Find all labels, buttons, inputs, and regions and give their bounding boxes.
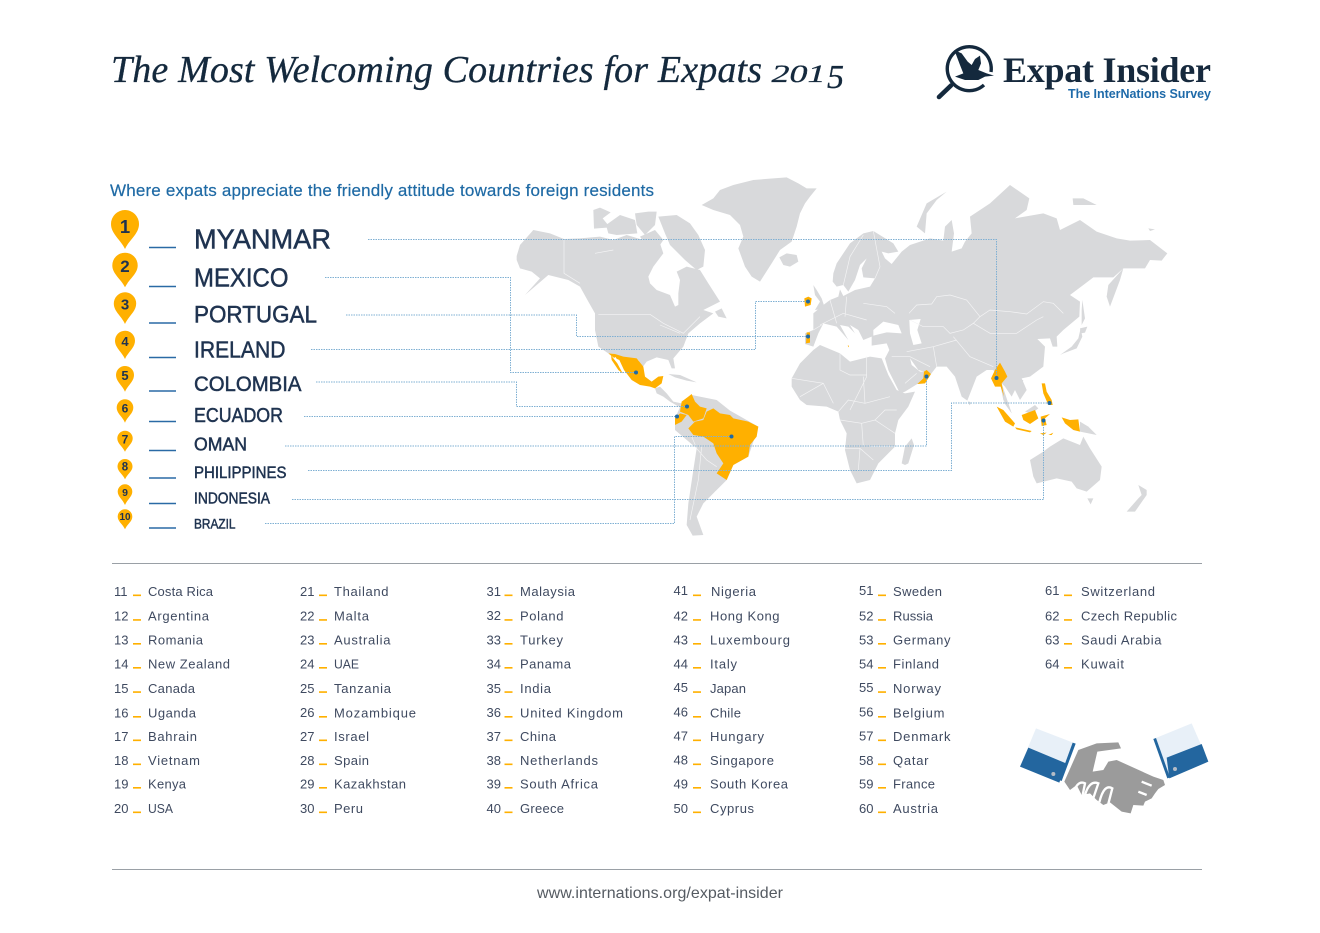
world map bbox=[517, 177, 1167, 536]
list column 41-50: 41 bbox=[674, 583, 688, 598]
list column 61-64 bbox=[1045, 583, 1178, 672]
list column 11-20: New Zealand bbox=[148, 656, 230, 672]
list column 11-20 bbox=[114, 584, 230, 816]
list column 11-20: Kenya bbox=[148, 776, 187, 792]
title: The Most Welcoming Countries for Expats bbox=[111, 49, 762, 91]
connector lines bbox=[265, 240, 1049, 524]
list column 31-40: 35 bbox=[486, 681, 501, 696]
list column 61-64: 62 bbox=[1045, 609, 1059, 624]
list column 51-60: 57 bbox=[859, 728, 873, 744]
list column 11-20: 16 bbox=[114, 706, 128, 720]
list column 51-60: 53 bbox=[859, 632, 873, 648]
logo: Expat Insider bbox=[939, 47, 1211, 101]
list column 31-40: 34 bbox=[486, 656, 501, 672]
list column 41-50: Italy bbox=[710, 656, 738, 672]
list column 51-60: Finland bbox=[893, 656, 939, 672]
list column 21-30: Malta bbox=[334, 609, 370, 624]
list column 21-30: Mozambique bbox=[334, 706, 416, 720]
location dots bbox=[634, 300, 1052, 438]
list column 41-50: Chile bbox=[710, 706, 741, 720]
list column 51-60: 58 bbox=[859, 753, 873, 768]
pins: 9 bbox=[122, 487, 128, 499]
list column 21-30: Kazakhstan bbox=[334, 776, 406, 792]
list column 31-40: 31 bbox=[486, 584, 501, 599]
list column 51-60: 56 bbox=[859, 704, 873, 720]
list column 41-50: Hungary bbox=[710, 729, 764, 744]
list column 41-50: 47 bbox=[674, 728, 688, 744]
list column 21-30: UAE bbox=[334, 656, 359, 672]
list column 51-60: 55 bbox=[859, 680, 873, 695]
list column 61-64: Switzerland bbox=[1081, 584, 1155, 599]
list column 51-60: 59 bbox=[859, 776, 873, 792]
list column 11-20: 13 bbox=[114, 632, 128, 648]
country names: MEXICO bbox=[194, 263, 288, 293]
list column 61-64: 61 bbox=[1045, 583, 1059, 598]
map: Americas bbox=[517, 177, 825, 536]
country names: IRELAND bbox=[194, 337, 286, 363]
list column 61-64: Kuwait bbox=[1081, 656, 1124, 672]
list column 21-30: Israel bbox=[334, 729, 369, 744]
list column 51-60 bbox=[859, 583, 951, 816]
icon: magnifying glass with bird bbox=[939, 47, 994, 97]
pins: 3 bbox=[121, 296, 129, 314]
list column 31-40: 39 bbox=[486, 776, 501, 792]
list column 41-50: Nigeria bbox=[711, 584, 757, 599]
list column 21-30: Peru bbox=[334, 801, 363, 816]
list column 31-40: China bbox=[520, 729, 557, 744]
pins: 2 bbox=[120, 257, 130, 276]
list column 51-60: Russia bbox=[893, 609, 934, 624]
list column 11-20: Bahrain bbox=[148, 729, 197, 744]
list column 61-64: Czech Republic bbox=[1081, 609, 1178, 624]
country names: BRAZIL bbox=[194, 515, 236, 531]
list column 31-40: 33 bbox=[486, 632, 501, 648]
list column 41-50: Hong Kong bbox=[710, 609, 780, 624]
list column 21-30: 29 bbox=[300, 776, 314, 792]
country names: MYANMAR bbox=[194, 223, 331, 254]
country names: INDONESIA bbox=[194, 491, 271, 508]
list column 41-50: Cyprus bbox=[710, 801, 754, 816]
list column 41-50: 48 bbox=[674, 752, 688, 768]
list column 31-40: Netherlands bbox=[520, 753, 598, 768]
list column 11-20: 15 bbox=[114, 681, 128, 696]
list column 41-50 bbox=[674, 583, 790, 816]
divider bbox=[112, 562, 1202, 564]
list column 31-40: 37 bbox=[486, 729, 501, 744]
list column 21-30: 24 bbox=[300, 656, 314, 672]
pins: 6 bbox=[122, 402, 129, 416]
list column 51-60: 60 bbox=[859, 801, 873, 816]
list column 31-40: India bbox=[520, 681, 552, 696]
list column 31-40: Panama bbox=[520, 656, 572, 672]
list column 21-30: 23 bbox=[300, 632, 314, 648]
pins: 5 bbox=[121, 368, 129, 383]
list column 31-40: Malaysia bbox=[520, 584, 576, 599]
list column 31-40 bbox=[486, 584, 623, 816]
list column 11-20: Romania bbox=[148, 632, 204, 648]
list column 21-30: 30 bbox=[300, 801, 314, 816]
list column 21-30: Tanzania bbox=[334, 681, 392, 696]
list column 21-30: 25 bbox=[300, 681, 314, 696]
list column 51-60: 51 bbox=[859, 583, 873, 598]
country names: COLOMBIA bbox=[194, 372, 302, 396]
country names: OMAN bbox=[194, 434, 247, 455]
list column 11-20: Vietnam bbox=[148, 753, 200, 768]
list column 11-20: Uganda bbox=[148, 706, 197, 720]
list column 21-30: 28 bbox=[300, 753, 314, 768]
country names: PHILIPPINES bbox=[194, 463, 286, 482]
list column 21-30 bbox=[300, 584, 416, 816]
list column 31-40: 40 bbox=[486, 801, 501, 816]
list column 21-30: 22 bbox=[300, 609, 314, 624]
list column 31-40: Turkey bbox=[520, 632, 564, 648]
list column 21-30: 26 bbox=[300, 705, 314, 720]
list column 11-20: 11 bbox=[114, 584, 128, 599]
pins: 4 bbox=[121, 334, 129, 349]
list column 31-40: South Africa bbox=[520, 776, 599, 792]
list column 21-30: 27 bbox=[300, 729, 314, 744]
list column 21-30: Thailand bbox=[334, 584, 388, 599]
list column 41-50: Luxembourg bbox=[710, 632, 790, 648]
list column 11-20: 14 bbox=[114, 656, 128, 672]
list column 41-50: 43 bbox=[674, 632, 688, 648]
list column 51-60: 52 bbox=[859, 609, 873, 624]
logo wordmark: Expat Insider bbox=[1003, 50, 1211, 90]
pins: 1 bbox=[120, 216, 130, 237]
list column 41-50: 50 bbox=[674, 801, 688, 816]
map: Eurasia, Africa, Oceania bbox=[792, 185, 1167, 512]
subtitle: Where expats appreciate the friendly attitude towards foreign residents bbox=[110, 181, 654, 200]
list column 31-40: 36 bbox=[486, 705, 501, 720]
list column 41-50: 45 bbox=[674, 680, 688, 695]
logo tagline: The InterNations Survey bbox=[1068, 87, 1211, 101]
list column 51-60: 54 bbox=[859, 656, 873, 672]
list column 51-60: Denmark bbox=[893, 729, 951, 744]
pins bbox=[111, 210, 139, 529]
list column 11-20: Canada bbox=[148, 681, 196, 696]
list column 11-20: 20 bbox=[114, 801, 128, 816]
list column 11-20: Argentina bbox=[148, 609, 210, 624]
pins: 8 bbox=[122, 462, 129, 474]
list column 51-60: France bbox=[893, 776, 935, 792]
list column 11-20: Costa Rica bbox=[148, 584, 214, 599]
list column 31-40: Greece bbox=[520, 801, 564, 816]
list column 41-50: 42 bbox=[674, 609, 688, 624]
list column 51-60: Qatar bbox=[893, 753, 929, 768]
list column 61-64: Saudi Arabia bbox=[1081, 632, 1162, 648]
list column 51-60: Austria bbox=[893, 801, 939, 816]
footer url: www.internations.org/expat-insider bbox=[536, 885, 784, 902]
list column 11-20: 19 bbox=[114, 776, 128, 792]
list column 11-20: USA bbox=[148, 801, 173, 816]
icon: handshake bbox=[1020, 723, 1208, 813]
list column 21-30: Australia bbox=[334, 632, 391, 648]
list column 51-60: Germany bbox=[893, 632, 951, 648]
list column 61-64: 64 bbox=[1045, 656, 1059, 672]
blue dashes bbox=[149, 248, 176, 528]
list column 51-60: Sweden bbox=[893, 584, 942, 599]
list column 41-50: 49 bbox=[674, 776, 688, 792]
footer divider bbox=[112, 868, 1202, 870]
pins: 10 bbox=[119, 512, 131, 523]
list column 41-50: 44 bbox=[674, 656, 688, 672]
ranked list 11 to 64 bbox=[114, 583, 1178, 816]
list column 31-40: Poland bbox=[520, 609, 564, 624]
list column 41-50: Japan bbox=[710, 681, 746, 696]
list column 21-30: 21 bbox=[300, 584, 314, 599]
country names: ECUADOR bbox=[194, 405, 283, 427]
list column 41-50: Singapore bbox=[710, 753, 774, 768]
top 10 ranking bbox=[111, 210, 331, 531]
list column 31-40: 32 bbox=[486, 608, 501, 623]
map: Ireland and Portugal highlights bbox=[804, 297, 812, 343]
title: 5 bbox=[827, 59, 844, 96]
list column 51-60: Norway bbox=[893, 681, 942, 696]
pins: 7 bbox=[122, 432, 129, 446]
list column 61-64: 63 bbox=[1045, 632, 1059, 648]
country names: PORTUGAL bbox=[194, 302, 317, 329]
list column 11-20: 17 bbox=[114, 729, 128, 744]
list column 41-50: South Korea bbox=[710, 776, 789, 792]
title: 201 bbox=[772, 61, 826, 88]
list column 11-20: 18 bbox=[114, 753, 128, 768]
list column 21-30: Spain bbox=[334, 753, 369, 768]
list column 31-40: United Kingdom bbox=[520, 706, 623, 720]
country names bbox=[194, 223, 331, 531]
list column 11-20: 12 bbox=[114, 609, 128, 624]
list column 31-40: 38 bbox=[486, 753, 501, 768]
list column 41-50: 46 bbox=[674, 704, 688, 720]
list column 51-60: Belgium bbox=[893, 706, 944, 720]
